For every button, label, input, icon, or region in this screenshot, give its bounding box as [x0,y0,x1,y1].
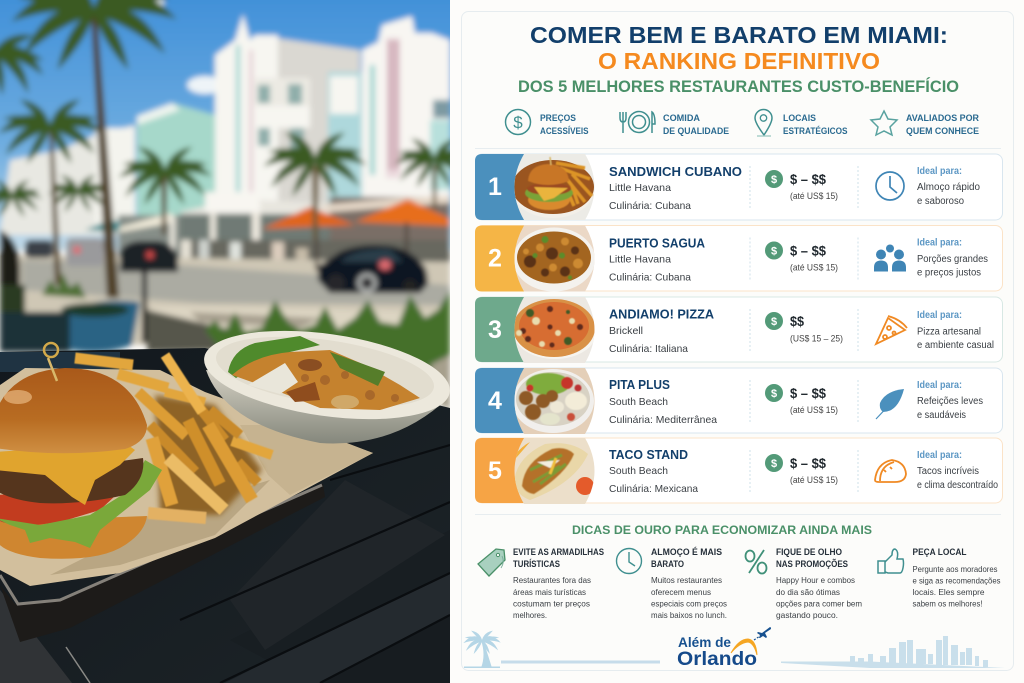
logo: Além de Orlando [677,627,771,670]
ideal para: Tacos incríveis [917,466,979,477]
tip 4: locais. Eles sempre [912,587,985,597]
icon: percent [746,550,766,574]
footer palm illustration [463,631,501,668]
restaurant details: Culinária: Italiana [609,343,688,355]
price [765,384,838,416]
restaurant details: South Beach [609,396,668,408]
restaurant details: ANDIAMO! PIZZA [609,306,715,322]
feature: preços acessíveis: $ [513,113,523,132]
feature: comida de qualidade [620,112,729,136]
restaurant row 2: Puerto Sagua [475,226,1002,292]
price: (até US$ 15) [790,475,838,486]
icon: pizza slice [876,316,907,344]
price: $ [771,458,777,470]
burger [0,343,162,559]
ideal para [917,310,994,351]
title [518,22,959,96]
restaurant row 4: Pita Plus [475,368,1002,434]
tray and paper [0,368,373,642]
feature: locais estratégicos: ESTRATÉGICOS [783,126,848,136]
tip 2: especiais com preços [651,598,728,608]
tip 4: sabem os melhores! [912,598,982,608]
palms [0,0,474,298]
ideal para: e saboroso [917,196,964,207]
rank 1 badge: 1 [488,173,502,201]
restaurant details: PUERTO SAGUA [609,236,706,250]
ideal para: Ideal para: [917,380,962,391]
tip 4 [878,547,1001,608]
rank 5 badge [475,438,526,503]
ideal para: e ambiente casual [917,340,994,351]
rank 3 badge: 3 [488,316,502,344]
price: $ [771,316,777,328]
rank 5 badge: 5 [488,457,502,485]
feature: avaliados por quem conhece: AVALIADOS POR [906,113,979,123]
tip 2: oferecem menus [651,587,712,597]
icon: group of people [874,244,906,272]
restaurant details: PITA PLUS [609,377,670,392]
ideal para: Pizza artesanal [917,326,981,338]
icon: clock [616,548,642,574]
price: $ – $$ [790,385,826,401]
dish photo: falafel salad bowl [514,368,594,434]
tip 1: costumam ter preços [513,598,591,608]
restaurant details [609,306,715,355]
icon: taco [875,460,906,482]
price [765,312,843,344]
tip 1: melhores. [513,610,547,620]
restaurant details [609,236,706,284]
restaurant details: Culinária: Cubana [609,272,691,284]
feature: preços acessíveis: ACESSÍVEIS [540,126,588,136]
title: COMER BEM E BARATO EM MIAMI: [530,22,948,48]
tip 3: NAS PROMOÇÕES [776,559,848,569]
price: $ – $$ [790,455,826,471]
ideal para: Porções grandes [917,254,988,265]
icon: thumbs up [878,549,904,573]
title: DOS 5 MELHORES RESTAURANTES CUSTO-BENEFÍCIO [518,77,959,96]
tip 4: e siga as recomendações [912,576,1001,586]
ideal para: Ideal para: [917,166,962,177]
ideal para [917,450,998,491]
feature: comida de qualidade: COMIDA [663,113,701,123]
tip 3: gastando pouco. [776,610,838,620]
feature: preços acessíveis [506,110,588,136]
ideal para [917,238,988,278]
price: $$ [790,313,804,329]
logo: Além de Orlando: Orlando [677,649,757,670]
tip 2 [616,547,728,620]
tip 1: Restaurantes fora das [513,575,592,585]
ideal para: e preços justos [917,268,981,278]
price: $ [771,246,777,258]
price: (até US$ 15) [790,262,838,274]
price: (até US$ 15) [790,191,838,202]
people and shops [180,240,450,266]
tip 3: do dia são ótimas [776,587,841,597]
restaurant details: Culinária: Cubana [609,200,691,212]
restaurant details: Brickell [609,325,643,337]
dish photo: burger and fries [514,154,594,220]
ideal para: Ideal para: [917,310,962,321]
restaurant details: Culinária: Mediterrânea [609,414,717,426]
fries [75,355,272,518]
tip 2: mais baixos no lunch. [651,610,727,620]
ideal para: e saudáveis [917,410,966,421]
salad bowl [204,330,450,444]
price: (US$ 15 – 25) [790,334,843,344]
footer skyline illustration [781,636,1005,668]
ideal para: Refeições leves [917,396,983,407]
price: $ – $$ [790,171,826,187]
rank 4 badge [475,368,526,433]
price: $ [771,388,777,400]
ideal para: Almoço rápido [917,182,980,193]
dish photo: pizza [514,297,594,363]
icon: leaf [876,389,904,419]
restaurant row 5: Taco Stand [475,438,1002,504]
restaurant row 3: Andiamo! Pizza [475,297,1002,363]
restaurant details: Culinária: Mexicana [609,483,698,495]
rank 4 badge: 4 [488,387,502,415]
restaurant details: SANDWICH CUBANO [609,164,742,179]
price [765,242,838,274]
ideal para: Ideal para: [917,238,962,248]
restaurant details: South Beach [609,465,668,477]
umbrellas [262,207,355,229]
street scene background [0,0,474,410]
ideal para [917,166,980,207]
tip 3 [746,547,862,620]
price: $ [771,174,777,186]
dish photo: taco [514,438,594,504]
feature: avaliados por quem conhece: QUEM CONHECE [906,126,979,136]
panel: main infographic [462,12,1014,670]
restaurant details: TACO STAND [609,447,688,462]
rank 2 badge: 2 [488,244,502,272]
restaurant details: Little Havana [609,182,671,194]
price [765,454,838,486]
tip 2: Muitos restaurantes [651,575,723,585]
price: (até US$ 15) [790,405,838,416]
restaurant details [609,164,742,212]
tip 2: ALMOÇO É MAIS [651,547,722,557]
restaurant details [609,447,698,495]
street ground [0,255,450,345]
tip 4: PEÇA LOCAL [912,547,967,557]
ideal para: Ideal para: [917,450,962,461]
tip 1 [478,547,604,620]
title: O RANKING DEFINITIVO [598,48,880,74]
tip 1: áreas mais turísticas [513,587,587,597]
icon: clock [876,172,904,200]
tip 3: opções para comer bem [776,598,862,608]
price: $ – $$ [790,242,826,258]
tip 2: BARATO [651,559,684,569]
restaurant details: Little Havana [609,254,671,266]
tip 4: Pergunte aos moradores [912,564,998,574]
tip 1: EVITE AS ARMADILHAS [513,547,604,557]
feature: locais estratégicos [755,110,848,136]
price [765,170,838,202]
tip 1: TURÍSTICAS [513,559,560,569]
feature: comida de qualidade: DE QUALIDADE [663,126,729,136]
logo: Além de Orlando: Além de [678,634,731,650]
planter and hedge [0,230,20,312]
rank 3 badge [475,297,526,362]
restaurant details [609,377,717,426]
heading: dicas de ouro: DICAS DE OURO PARA ECONOMIZAR AINDA MAIS [572,523,872,537]
ideal para: e clima descontraído [917,480,998,491]
photo: Miami street and food on table [0,0,474,683]
restaurant row 1: Sandwich Cubano [475,154,1002,220]
feature: preços acessíveis: PREÇOS [540,113,576,123]
dish photo: meat and rice bowl [514,226,594,292]
table [0,348,450,683]
rank 1 badge [475,154,526,220]
icon: price tag [478,549,505,576]
tip 3: Happy Hour e combos [776,575,856,585]
feature: locais estratégicos: LOCAIS [783,113,816,123]
feature: avaliados por quem conhece [871,111,979,136]
rank 2 badge [475,226,526,292]
tip 3: FIQUE DE OLHO [776,547,842,557]
ideal para [917,380,983,421]
